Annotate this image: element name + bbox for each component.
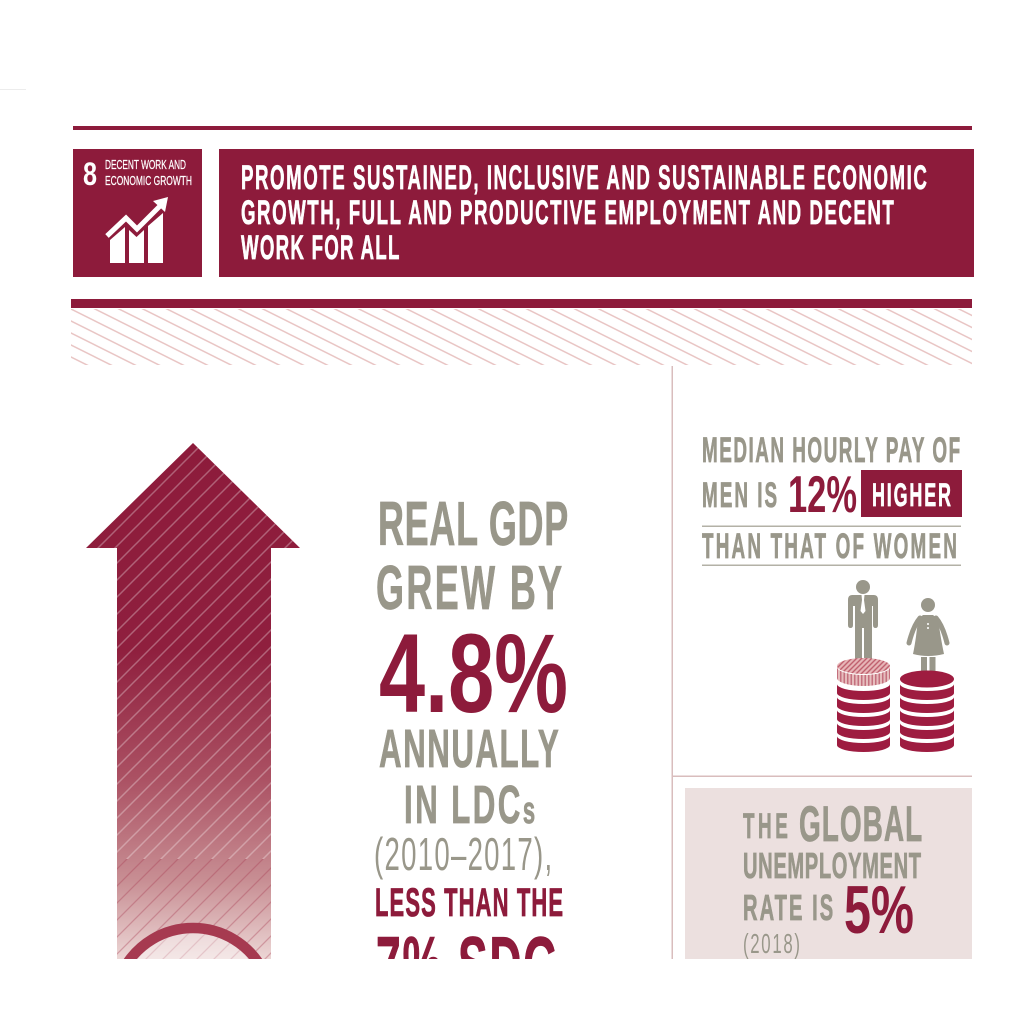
panel: goal statement: GROWTH, FULL AND PRODUCTIVE EMPLOYMENT AND DECENT	[241, 193, 894, 231]
text: GDP growth statement: LESS THAN THE	[375, 880, 563, 925]
panel: global unemployment: RATE IS	[743, 889, 833, 929]
corner mark	[0, 89, 26, 90]
icon: woman	[909, 598, 947, 679]
panel: SDG 8 badge: 8	[83, 156, 97, 192]
panel dividers	[672, 366, 972, 959]
text: GDP growth statement: GREW BY	[376, 553, 562, 622]
panel: SDG 8 badge: ECONOMIC GROWTH	[105, 173, 192, 188]
text: median hourly pay	[702, 431, 962, 566]
icon: taller coin stack	[837, 658, 890, 752]
text: median hourly pay: MEN IS	[702, 476, 777, 514]
panel: goal statement	[219, 149, 974, 277]
panel: global unemployment: UNEMPLOYMENT	[743, 847, 921, 887]
panel: goal statement: PROMOTE SUSTAINED, INCLUSIVE AND SUSTAINABLE ECONOMIC	[241, 158, 927, 196]
panel: goal statement: WORK FOR ALL	[241, 228, 399, 266]
text: median hourly pay: 12%	[788, 466, 857, 524]
panel: global unemployment: 5%	[844, 872, 914, 948]
text: GDP growth statement: ANNUALLY	[379, 719, 559, 779]
text: GDP growth statement: IN LDCs	[404, 775, 535, 835]
icon: rising arrow	[86, 443, 300, 965]
text: GDP growth statement	[376, 501, 568, 959]
icon: man	[848, 580, 878, 662]
panel: global unemployment: (2018)	[743, 928, 800, 959]
panel: SDG 8 badge	[73, 149, 202, 277]
text: median hourly pay: THAN THAT OF WOMEN	[702, 527, 957, 565]
panel: SDG 8 badge: DECENT WORK AND	[105, 157, 186, 172]
text: GDP growth statement: 4.8%	[379, 611, 568, 736]
icon: growth chart	[107, 197, 168, 263]
callout: higher: HIGHER	[872, 479, 951, 513]
text: GDP growth statement: REAL GDP	[378, 489, 568, 558]
hatched band	[71, 299, 972, 365]
text: GDP growth statement: (2010–2017),	[374, 830, 552, 881]
text: GDP growth statement: 7% SDG	[376, 922, 558, 1008]
text: median hourly pay: MEDIAN HOURLY PAY OF	[702, 431, 960, 469]
panel: global unemployment	[685, 788, 972, 959]
panel: global unemployment: THE	[743, 807, 788, 845]
icon: shorter coin stack	[900, 670, 954, 752]
callout: higher	[861, 470, 962, 517]
top rule	[73, 126, 972, 130]
panel: global unemployment: GLOBAL	[799, 795, 922, 852]
